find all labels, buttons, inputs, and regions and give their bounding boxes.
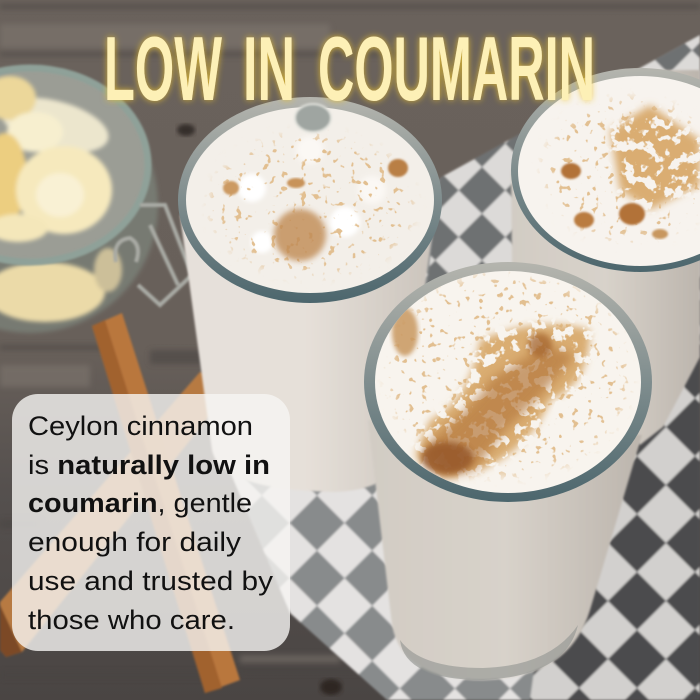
panel copy: [28, 411, 274, 635]
middle glass: [178, 97, 442, 492]
cinnamon dusting: [388, 275, 628, 478]
banana slices: [0, 76, 122, 322]
jar of banana slices: [0, 68, 192, 333]
foam and cinnamon: [212, 135, 412, 275]
title: LOW: [104, 19, 222, 120]
front glass: [364, 262, 652, 680]
jar rim: [0, 68, 148, 262]
checkered cloth: [225, 35, 700, 700]
cinnamon sticks: [0, 313, 240, 693]
title: IN: [243, 19, 295, 120]
air bubble: [295, 104, 331, 132]
text panel: [12, 394, 290, 651]
panel copy: those who care.: [28, 605, 235, 635]
cinnamon dusting: [545, 100, 700, 240]
jar clasp: [115, 205, 192, 305]
panel copy: Ceylon cinnamon: [28, 411, 253, 441]
panel copy: enough for daily: [28, 527, 242, 557]
panel copy: is naturally low in: [28, 450, 270, 480]
panel copy: use and trusted by: [28, 566, 274, 596]
title: [104, 19, 595, 120]
panel copy: coumarin , gentle: [28, 488, 252, 518]
right glass: [511, 68, 700, 445]
